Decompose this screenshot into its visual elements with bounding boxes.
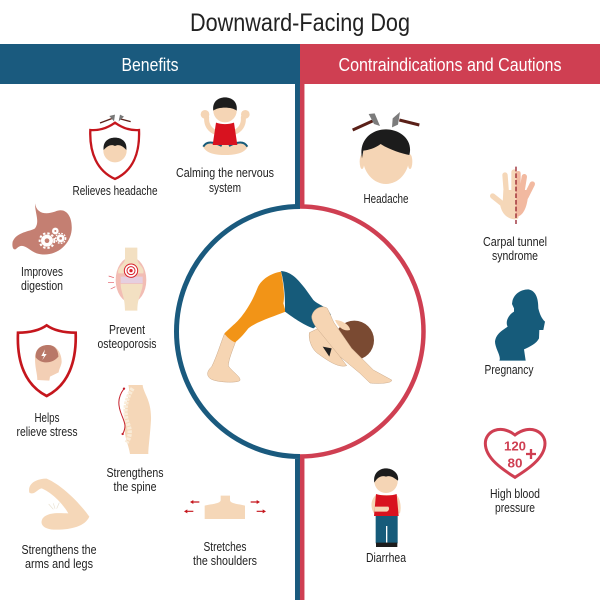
label: high blood pressure — [490, 486, 540, 515]
label: improves digestion: Improves — [21, 264, 63, 279]
icon: head with hammers — [353, 112, 419, 184]
icon: shoulders with arrows — [184, 496, 266, 519]
label: stretches the shoulders — [193, 539, 257, 568]
label: helps relieve stress: relieve stress — [16, 424, 78, 439]
label: diarrhea: Diarrhea — [366, 550, 407, 565]
label: pregnancy: Pregnancy — [484, 362, 534, 377]
label: strengthens the arms and legs: Strengthens the — [22, 542, 96, 557]
label: strengthens the spine: the spine — [114, 479, 156, 494]
icon: stomach with gears — [12, 203, 72, 254]
title: Downward-Facing Dog — [190, 9, 410, 37]
label: carpal tunnel syndrome: syndrome — [492, 248, 538, 263]
header: contraindications and cautions: Contraindications and Cautions — [338, 55, 562, 75]
label: helps relieve stress: Helps — [34, 410, 60, 425]
label: prevent osteoporosis: osteoporosis — [98, 336, 157, 351]
label: carpal tunnel syndrome: Carpal tunnel — [483, 234, 547, 249]
label: strengthens the arms and legs — [22, 542, 96, 571]
label: calming the nervous system — [176, 165, 274, 195]
yoga figure: downward-facing dog — [208, 271, 392, 383]
label: high blood pressure: High blood — [490, 486, 540, 501]
label: improves digestion: digestion — [21, 278, 63, 293]
label: strengthens the arms and legs: arms and legs — [25, 556, 93, 571]
label: helps relieve stress — [16, 410, 78, 439]
label: prevent osteoporosis: Prevent — [109, 322, 145, 337]
label: strengthens the spine: Strengthens — [106, 465, 164, 480]
icon: heart with blood pressure: 80 — [507, 455, 522, 470]
label: relieves headache: Relieves headache — [72, 183, 158, 198]
label: carpal tunnel syndrome — [483, 234, 547, 263]
label: calming the nervous system: system — [209, 180, 241, 195]
header: contraindications and cautions — [300, 44, 600, 84]
icon: hand with median line — [493, 167, 532, 224]
icon: spine on torso — [119, 385, 151, 454]
blue divider and left half ring — [176, 84, 300, 600]
icon: shield with headache — [90, 115, 139, 179]
icon: flexed arm — [29, 479, 89, 530]
label: calming the nervous system: Calming the nervous — [176, 165, 274, 180]
icon: heart with blood pressure: 120 — [504, 439, 526, 454]
header: benefits — [0, 44, 300, 84]
icon: bone joint — [108, 248, 146, 311]
label: improves digestion — [21, 264, 63, 293]
icon: boy holding stomach — [371, 468, 401, 547]
label: prevent osteoporosis — [98, 322, 157, 351]
red divider and right half ring — [300, 84, 424, 600]
icon: heart with blood pressure — [485, 429, 545, 477]
icon: shield with stressed head — [18, 325, 76, 396]
icon: pregnant silhouette — [495, 289, 545, 361]
label: headache: Headache — [364, 191, 408, 206]
header: benefits: Benefits — [122, 55, 178, 75]
label: strengthens the spine — [106, 465, 164, 494]
label: stretches the shoulders: the shoulders — [193, 553, 257, 568]
label: stretches the shoulders: Stretches — [204, 539, 247, 554]
icon: meditating person — [201, 97, 250, 155]
label: high blood pressure: pressure — [495, 500, 535, 515]
